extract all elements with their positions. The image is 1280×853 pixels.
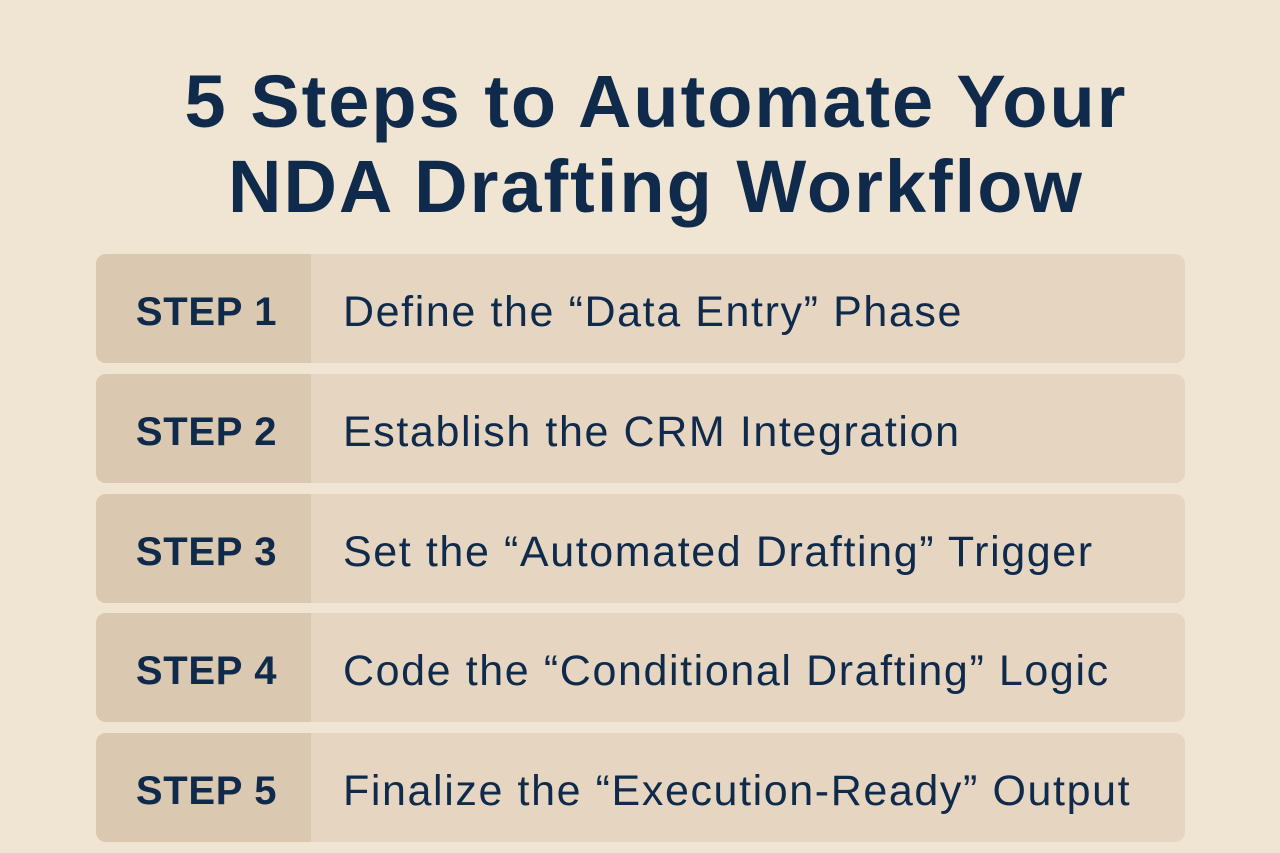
step 5: Finalize the “Execution-Ready” Output	[343, 767, 1131, 815]
title	[184, 60, 1127, 228]
step 1: Define the “Data Entry” Phase	[343, 288, 963, 336]
step 3	[96, 494, 1185, 603]
step 3: Set the “Automated Drafting” Trigger	[343, 528, 1094, 576]
title: 5 Steps to Automate Your	[184, 60, 1127, 143]
step 1: STEP 1	[136, 290, 277, 334]
step 3: STEP 3	[136, 530, 277, 574]
step 2	[96, 374, 1185, 483]
title: NDA Drafting Workflow	[228, 145, 1084, 228]
step 4: STEP 4	[136, 649, 277, 693]
step 4: Code the “Conditional Drafting” Logic	[343, 647, 1110, 695]
step 1	[96, 254, 1185, 363]
step 2: Establish the CRM Integration	[343, 408, 961, 456]
step 4	[96, 613, 1185, 722]
step 2: STEP 2	[136, 410, 277, 454]
step 5: STEP 5	[136, 769, 277, 813]
step 5	[96, 733, 1185, 842]
